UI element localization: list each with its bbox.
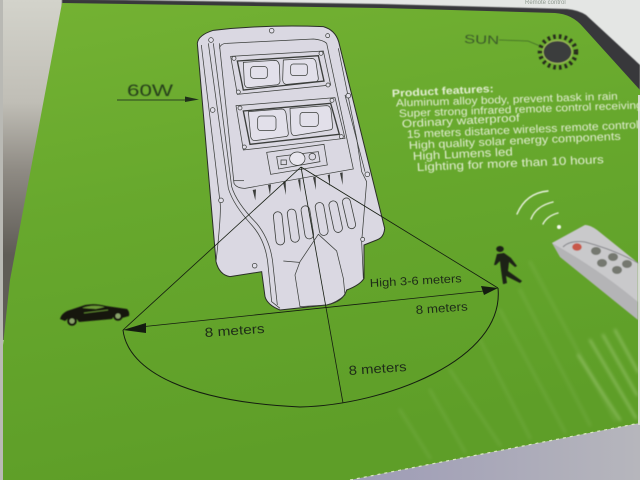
label: 8 meters left: 8 meters (204, 321, 266, 340)
strip at right edge (638, 95, 640, 425)
text block: product features: Ordinary waterproof (402, 112, 521, 130)
label: 8 meters right: 8 meters (415, 299, 468, 317)
chart: sensor coverage diagram (123, 167, 498, 407)
icon: remote control (552, 225, 638, 320)
text block: product features: Aluminum alloy body, prevent bask in rain (396, 91, 618, 109)
background: table and surroundings: Remote control (525, 0, 566, 6)
text block: product features: Super strong infrared remote control receiving (399, 99, 640, 120)
lower LED module (236, 98, 345, 150)
icon: sun with label (464, 32, 576, 68)
heat sink fins and slots (253, 172, 343, 200)
icon: wireless signal arcs (517, 191, 561, 229)
text block: product features: High quality solar energy components (409, 131, 622, 152)
lamp body outline (197, 26, 385, 310)
label: High 3-6 meters: High 3-6 meters (370, 273, 462, 290)
text block: product features: Product features: (392, 83, 494, 100)
text block: product features: High Lumens led (413, 146, 513, 163)
arrowhead: right (481, 286, 498, 295)
icon: sun with label: SUN (464, 32, 499, 47)
mounting holes (209, 28, 370, 268)
text block: product features: 15 meters distance wireless remote control (407, 119, 639, 141)
arrowhead: left (123, 323, 146, 333)
printed surface streaks (400, 262, 638, 458)
text block: product features: Lighting for more than 10 hours (417, 154, 604, 174)
coverage semi-ellipse (123, 288, 498, 407)
box bottom edge (350, 423, 640, 480)
pole mount shape (295, 234, 345, 307)
sensor control panel (267, 144, 327, 174)
remote buttons (572, 243, 582, 251)
width dimension line (140, 291, 484, 327)
label: 60W with pointer: 60W (127, 82, 174, 100)
sensor detection rays (123, 167, 498, 403)
icon: car (60, 304, 129, 326)
icon: walking person (494, 246, 522, 284)
label: 8 meters bottom: 8 meters (348, 359, 408, 378)
text block: product features (392, 83, 640, 174)
icon: street lamp (197, 26, 385, 310)
label: 60W with pointer (117, 82, 199, 102)
lamp inner contour lines (201, 39, 367, 308)
box dark rim (62, 0, 640, 95)
upper LED module (231, 51, 331, 94)
